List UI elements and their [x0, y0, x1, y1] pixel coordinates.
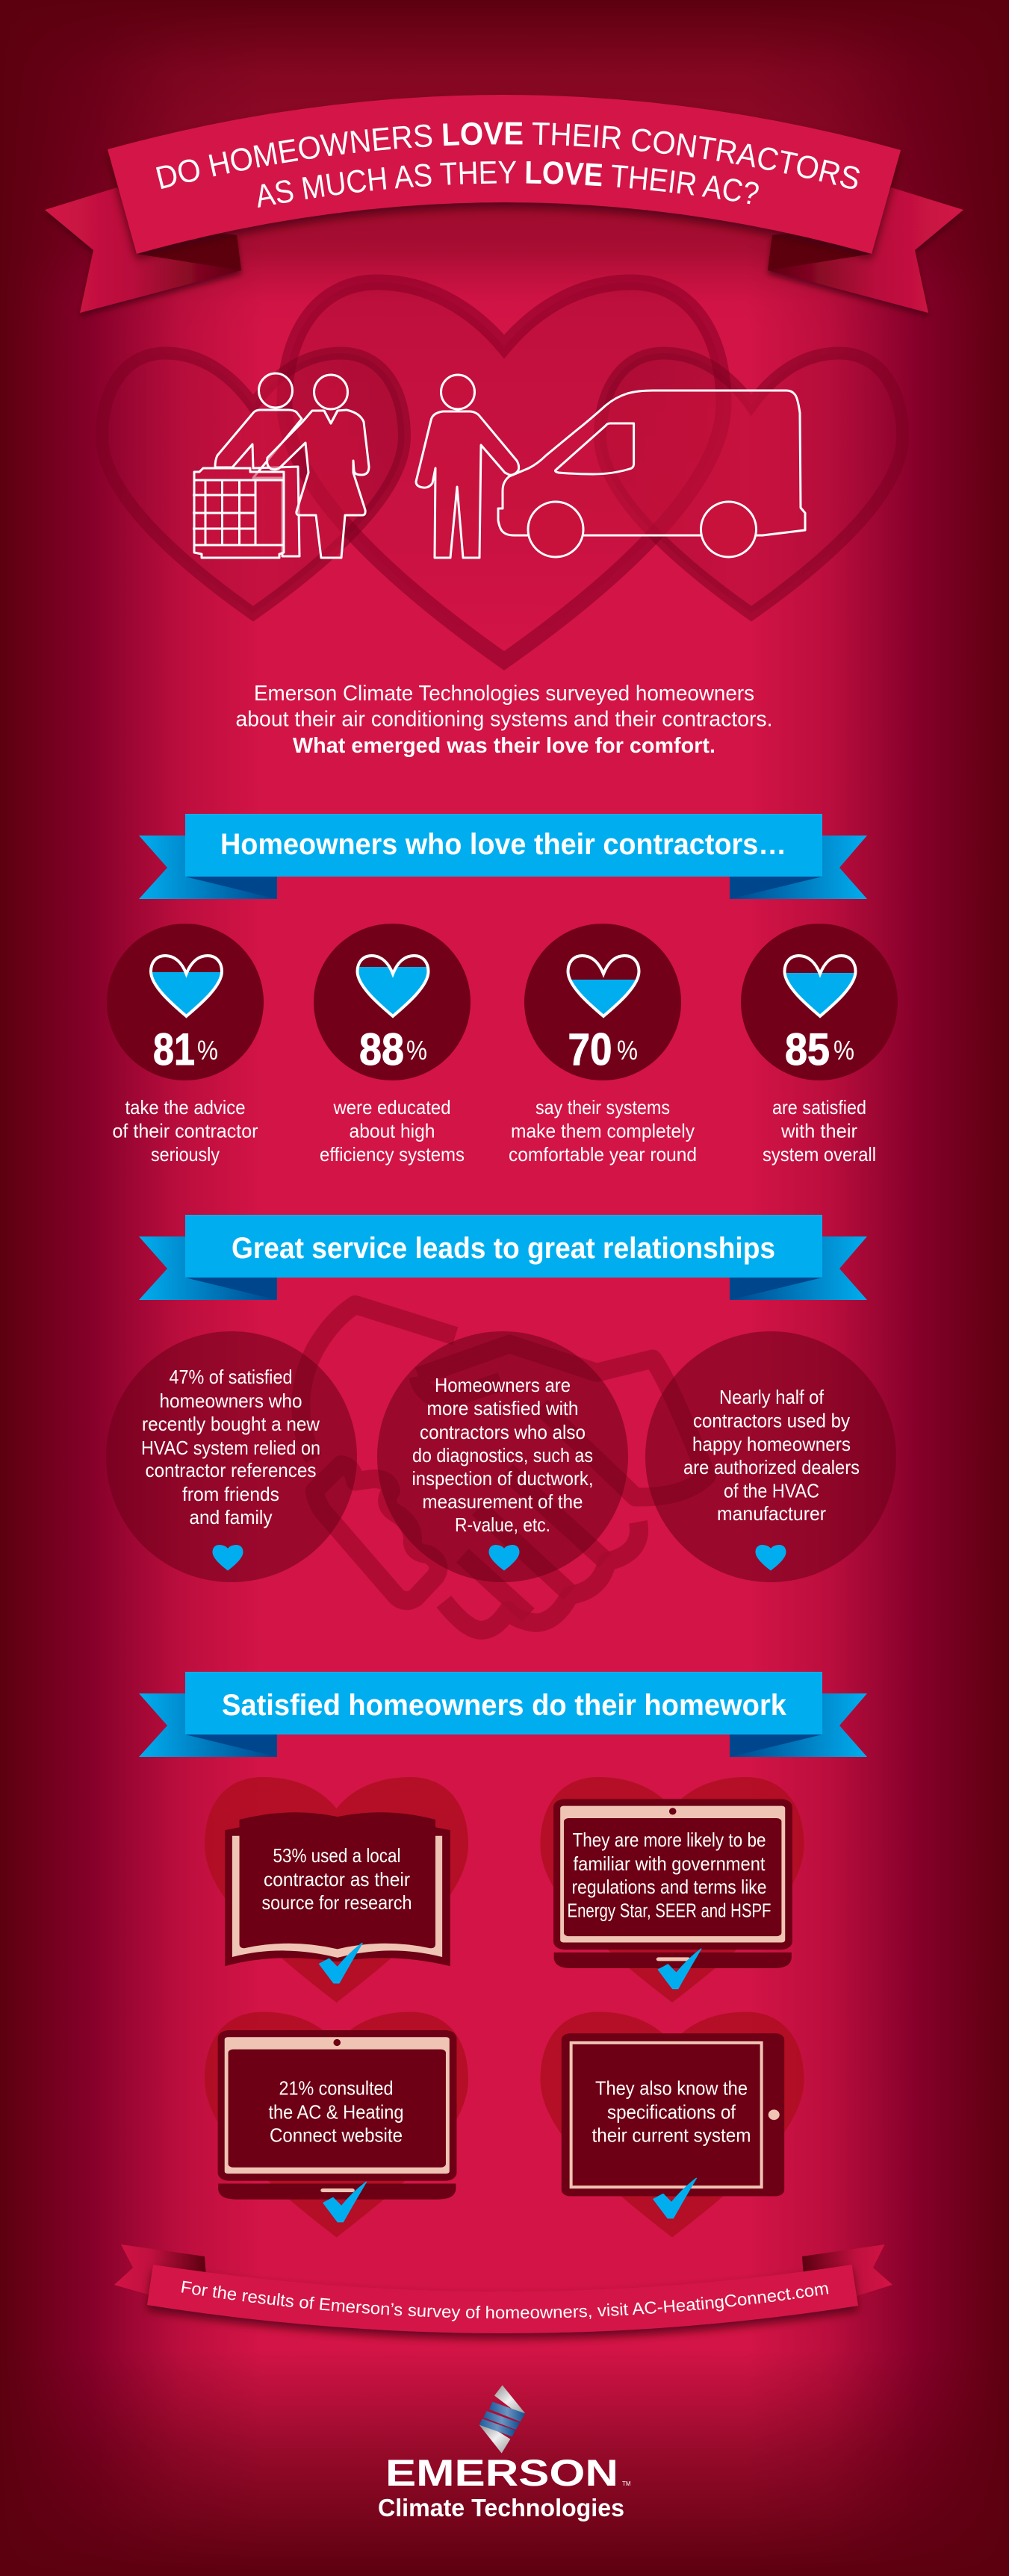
info circle: authorized dealers: happy homeowners	[692, 1433, 851, 1455]
caption: 70%: comfortable year round	[509, 1143, 697, 1166]
info circle: references: contractor references	[145, 1459, 317, 1481]
text: regulations: They are more likely to be	[572, 1829, 766, 1851]
info circle: diagnostics: measurement of the	[423, 1490, 583, 1513]
text: specifications: their current system	[592, 2124, 751, 2147]
title text: DO HOMEOWNERS LOVE THEIR CONTRACTORS	[156, 122, 860, 190]
caption: 88%: about high	[350, 1120, 435, 1142]
left ribbon tail	[45, 187, 241, 313]
stat: 85%	[741, 924, 898, 1080]
info circle: diagnostics: more satisfied with	[427, 1397, 578, 1419]
info circle: authorized dealers	[645, 1331, 896, 1582]
intro text: What emerged was their love for comfort.	[293, 734, 715, 758]
caption: 88%: were educated	[333, 1096, 451, 1119]
caption: 70%: say their systems	[535, 1096, 670, 1119]
man left	[215, 373, 302, 556]
section banner: homework: Satisfied homeowners do their homework	[222, 1689, 787, 1722]
info circle: authorized dealers: contractors used by	[693, 1410, 850, 1432]
icon: tablet	[562, 2033, 784, 2196]
text: local contractor	[261, 1844, 412, 1914]
icon: check marks	[320, 1943, 701, 2222]
hero hearts	[102, 282, 902, 661]
info circle: diagnostics: do diagnostics, such as	[412, 1444, 593, 1466]
info circle: references	[106, 1331, 357, 1582]
section banner: homeowners who love their contractors	[139, 814, 867, 899]
caption: 85%: are satisfied	[772, 1096, 866, 1119]
section banner: homeowners who love their contractors: Homeowners who love their contractors…	[220, 828, 786, 861]
intro text: Emerson Climate Technologies surveyed homeowners	[254, 682, 754, 706]
info circle: diagnostics	[377, 1331, 628, 1582]
info circle: references: homeowners who	[160, 1390, 302, 1412]
icon: open book	[225, 1812, 450, 1966]
caption: 85%: with their	[780, 1120, 857, 1142]
section banner: homework	[139, 1672, 867, 1757]
caption: 85%: system overall	[763, 1143, 876, 1166]
text: regulations: familiar with government	[574, 1852, 766, 1875]
text: regulations: regulations and terms like	[572, 1876, 766, 1898]
caption: 81%	[112, 1096, 258, 1166]
icon: laptop bottom left	[218, 2030, 456, 2200]
caption: 81%: take the advice	[125, 1096, 245, 1119]
stat: 88%: %	[406, 1035, 427, 1065]
info circle: references: from friends	[182, 1483, 279, 1505]
info circle: diagnostics: R-value, etc.	[455, 1513, 550, 1536]
text: local contractor: source for research	[261, 1891, 412, 1914]
footer left tail	[114, 2244, 206, 2296]
text: website: Connect website	[270, 2124, 403, 2147]
info circle: diagnostics: contractors who also	[420, 1421, 586, 1443]
van wheels	[528, 502, 756, 557]
Emerson logo	[378, 2385, 631, 2521]
text: website: the AC & Heating	[269, 2101, 403, 2124]
info circle: diagnostics: inspection of ductwork,	[412, 1467, 593, 1490]
footer right tail	[802, 2244, 892, 2296]
text: local contractor: 53% used a local	[273, 1844, 400, 1867]
main ribbon	[108, 95, 901, 254]
info circle: authorized dealers: manufacturer	[717, 1502, 826, 1525]
icon: logo diamond	[479, 2385, 525, 2454]
footer text: For the results of Emerson’s survey of homeowners, visit AC-HeatingConnect.com.	[181, 2280, 829, 2321]
caption: 70%: make them completely	[511, 1120, 695, 1142]
stat: 81%	[107, 924, 264, 1080]
icon: heart 88	[357, 956, 429, 1016]
icon: blue heart	[488, 1545, 520, 1571]
background hearts behind devices	[205, 1777, 804, 2237]
stat: 70%	[524, 924, 681, 1080]
text: regulations: Energy Star, SEER and HSPF	[568, 1900, 771, 1922]
icon: heart 70	[568, 956, 639, 1016]
icon: heart 81	[151, 956, 222, 1016]
icon: heart 85	[784, 956, 856, 1016]
title ribbon	[45, 95, 963, 318]
right ribbon tail	[768, 187, 963, 313]
info circle: references: 47% of satisfied	[169, 1366, 293, 1388]
info circle: references: and family	[190, 1506, 272, 1528]
info circle: authorized dealers: of the HVAC	[724, 1480, 819, 1502]
woman	[267, 375, 369, 558]
text: regulations	[568, 1829, 771, 1922]
right heart	[600, 353, 902, 614]
info circle: references: HVAC system relied on	[141, 1437, 320, 1459]
icon: blue heart	[756, 1545, 786, 1571]
Emerson logo: EMERSON	[385, 2452, 618, 2494]
air conditioner unit	[193, 468, 284, 558]
footer main band	[147, 2265, 858, 2333]
stat: 70%: %	[617, 1035, 638, 1065]
big centre heart	[285, 282, 724, 661]
stat: 88%: 88	[359, 1024, 404, 1074]
text: specifications: They also know the	[595, 2077, 748, 2100]
icon: blue heart	[212, 1545, 243, 1571]
service van	[498, 391, 805, 557]
contractor man	[416, 375, 519, 558]
intro text: about their air conditioning systems and their contractors.	[236, 708, 772, 732]
caption: 88%: efficiency systems	[320, 1143, 465, 1166]
title text: AS MUCH AS THEY LOVE THEIR AC?	[258, 161, 759, 208]
stat: 81%: 81	[153, 1024, 195, 1074]
hero figures	[193, 373, 805, 558]
caption: 70%	[509, 1096, 697, 1166]
stat: 85%: 85	[785, 1024, 830, 1074]
section banner: great service: Great service leads to great relationships	[232, 1232, 775, 1265]
text: local contractor: contractor as their	[264, 1868, 410, 1891]
text: specifications: specifications of	[607, 2101, 736, 2124]
Emerson logo: TM	[622, 2480, 631, 2487]
info circle: authorized dealers: Nearly half of	[719, 1386, 825, 1408]
info circle: authorized dealers: are authorized dealers	[683, 1456, 860, 1478]
caption: 85%	[763, 1096, 876, 1166]
Emerson logo: Climate Technologies	[378, 2494, 624, 2521]
text: website: 21% consulted	[279, 2077, 393, 2100]
stat: 70%: 70	[568, 1024, 612, 1074]
text: website	[269, 2077, 403, 2147]
caption: 88%	[320, 1096, 465, 1166]
handshake outline illustration	[301, 1304, 707, 1630]
stat: 81%: %	[197, 1035, 218, 1065]
intro text	[236, 682, 772, 758]
stat: 85%: %	[833, 1035, 854, 1065]
icon: laptop top right	[553, 1799, 792, 1968]
text: specifications	[592, 2077, 751, 2147]
caption: 81%: seriously	[151, 1143, 220, 1166]
stat: 88%	[314, 924, 471, 1080]
info circle: diagnostics: Homeowners are	[435, 1374, 571, 1396]
left heart	[102, 353, 404, 614]
section banner: great service	[139, 1215, 867, 1300]
caption: 81%: of their contractor	[112, 1120, 258, 1142]
info circle: references: recently bought a new	[142, 1413, 320, 1435]
